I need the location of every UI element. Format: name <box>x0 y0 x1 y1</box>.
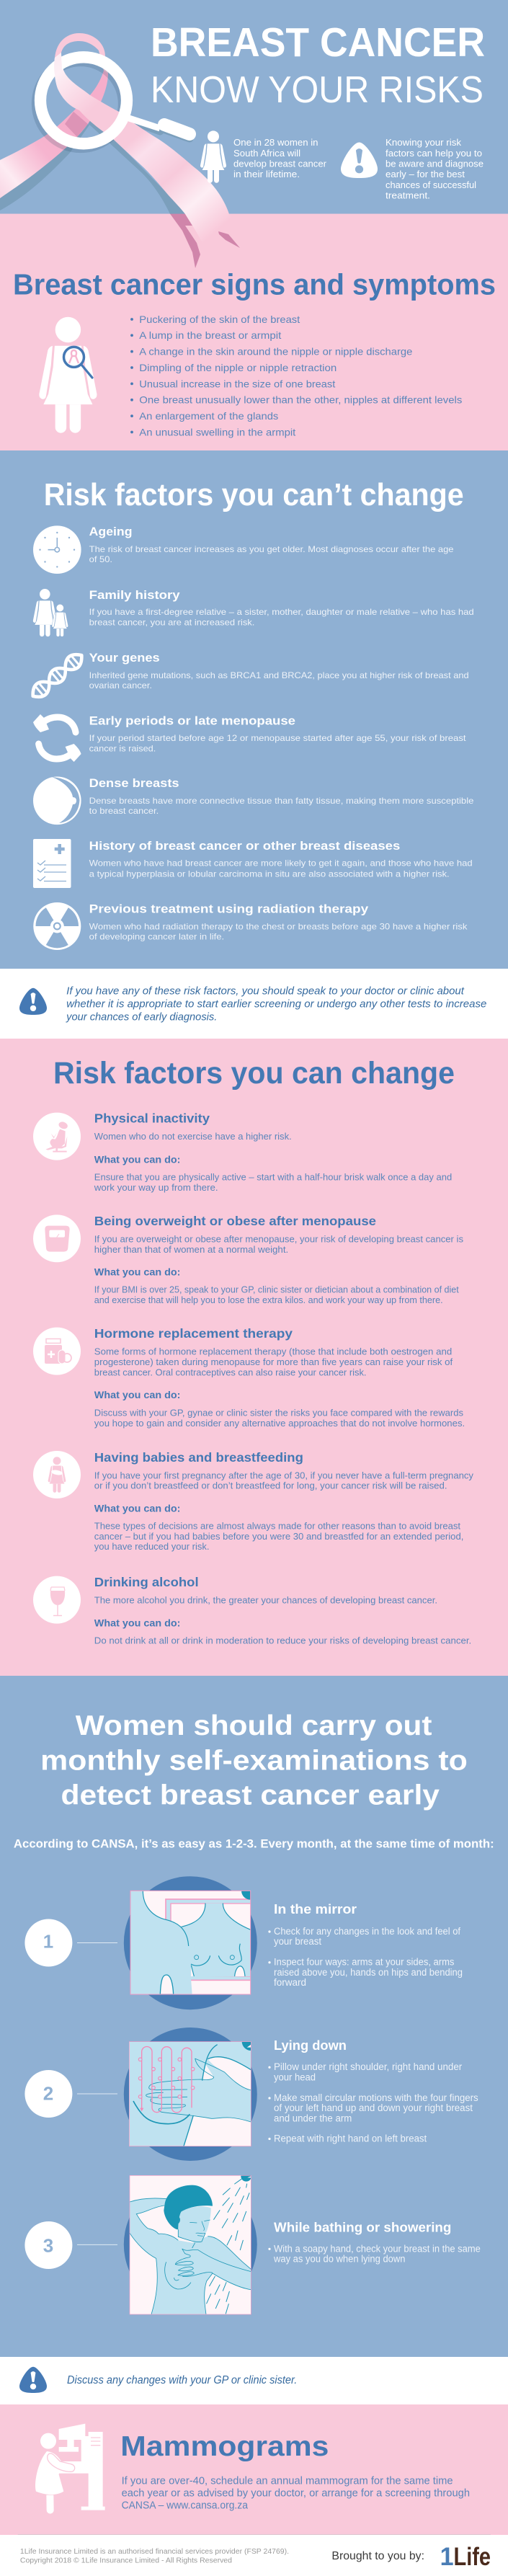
text: in the mirror: Check for any changes in the look and feel of <box>274 1926 460 1937</box>
heading: signs and symptoms: Breast cancer signs and symptoms <box>13 267 496 301</box>
step 1: in the mirror <box>24 1876 463 2009</box>
text: lying down: and under the arm <box>274 2113 352 2123</box>
title: babies and breastfeeding: Having babies and breastfeeding <box>94 1450 303 1465</box>
number badge 2: 2 <box>43 2082 53 2104</box>
text: overweight: If you are overweight or obese after menopause, your risk of developing breast cancer is <box>94 1235 463 1245</box>
title: lying down: Lying down <box>274 2038 347 2053</box>
list: symptoms: A change in the skin around the nipple or nipple discharge <box>139 346 413 357</box>
item: family history <box>33 588 474 636</box>
number badge 1: 1 <box>43 1931 53 1953</box>
title: previous treatment: Previous treatment using radiation therapy <box>89 902 369 915</box>
text: lying down: of your left hand up and down your right breast <box>274 2102 473 2113</box>
subheading: what you can do: What you can do: <box>94 1390 180 1400</box>
title: ageing: Ageing <box>89 525 133 538</box>
text: advice: you hope to gain and consider any alternative approaches that do not involve hormones. <box>94 1418 465 1429</box>
text: history of breast cancer: a typical hyperplasia or lobular carcinoma in situ are also associated with a higher risk. <box>89 869 450 879</box>
text: advice: work your way up from there. <box>94 1183 218 1193</box>
heading: self-examinations: monthly self-examinations to <box>40 1746 468 1776</box>
illustration: ribbon and magnifying glass <box>0 33 240 268</box>
text: knowing your risk factors: factors can help you to <box>386 148 482 159</box>
text: knowing your risk factors: be aware and diagnose <box>386 159 484 169</box>
text: ageing: of 50. <box>89 554 112 564</box>
text: lying down: Repeat with right hand on left breast <box>274 2133 427 2144</box>
text: knowing your risk factors <box>386 138 484 200</box>
heading: self-examinations: detect breast cancer early <box>61 1780 440 1811</box>
logo: 1Life: 1 <box>440 2543 454 2571</box>
illustration: woman in shower <box>124 2171 257 2314</box>
text: one in 28 women: One in 28 women in <box>233 138 318 148</box>
icon: radiation <box>33 902 81 950</box>
icon: warning <box>19 2367 47 2393</box>
text: advice: you have reduced your risk. <box>94 1542 209 1552</box>
text: your genes: Inherited gene mutations, such as BRCA1 and BRCA2, place you at higher risk of breast and <box>89 670 469 680</box>
text: babies and breastfeeding: or if you don’t breastfeed or don’t breastfeed for long, your cancer risk will be raised. <box>94 1481 447 1491</box>
panel: signs and symptoms <box>0 213 508 450</box>
subheading: according to CANSA: According to CANSA, it’s as easy as 1-2-3. Every month, at the same time of month: <box>14 1836 494 1850</box>
text: while bathing or showering: With a soapy hand, check your breast in the same <box>274 2243 481 2254</box>
icon: woman with magnifier <box>39 317 97 433</box>
list: symptoms: Unusual increase in the size of one breast <box>139 378 335 389</box>
text: mammogram advice: each year or as advised by your doctor, or arrange for a screening through <box>122 2487 470 2500</box>
text: legal notice <box>20 2547 289 2565</box>
logo: 1Life: Life <box>454 2543 491 2571</box>
text: mammogram advice: CANSA – www.cansa.org.za <box>122 2499 249 2511</box>
text: while bathing or showering <box>268 2243 481 2265</box>
text: history of breast cancer <box>89 858 473 879</box>
heading: self-examinations: Women should carry out <box>76 1710 432 1741</box>
item: ageing <box>33 525 454 574</box>
illustration: woman at mirror <box>124 1876 257 2009</box>
text: advice: If your BMI is over 25, speak to your GP, clinic sister or dietician about a combination of diet <box>94 1285 459 1295</box>
heading: risk factors you can change: Risk factors you can change <box>53 1057 455 1091</box>
text: speak to your doctor: your chances of early diagnosis. <box>66 1011 217 1023</box>
text: hormone replacement therapy: progesterone) taken during menopause for more than five years can raise your risk of <box>94 1357 453 1367</box>
icon: woman <box>200 130 226 183</box>
text: lying down: Make small circular motions with the four fingers <box>274 2092 478 2103</box>
title: know your risks: KNOW YOUR RISKS <box>151 69 484 111</box>
text: your genes: ovarian cancer. <box>89 680 152 690</box>
item: overweight <box>33 1214 463 1305</box>
number badge 3: 3 <box>43 2234 53 2256</box>
item: previous treatment <box>33 902 468 950</box>
text: overweight <box>94 1235 463 1255</box>
title: in the mirror: In the mirror <box>274 1902 357 1917</box>
text: previous treatment: Women who had radiation therapy to the chest or breasts before age 30 have a higher risk <box>89 921 468 931</box>
illustration: hand on breast with pattern <box>124 2028 257 2161</box>
text: advice: Discuss with your GP, gynae or clinic sister the risks you face compared with the rewards <box>94 1408 463 1418</box>
text: drinking alcohol: The more alcohol you drink, the greater your chances of developing breast cancer. <box>94 1596 437 1606</box>
panel: risk factors you can't change <box>0 450 508 969</box>
text: one in 28 women: in their lifetime. <box>233 169 300 179</box>
list: symptoms: A lump in the breast or armpit <box>139 329 281 341</box>
text: speak to your doctor <box>66 986 486 1023</box>
text: mammogram advice: If you are over-40, schedule an annual mammogram for the same time <box>122 2475 453 2487</box>
icon: warning <box>19 988 47 1015</box>
text: brought to you by: Brought to you by: <box>331 2550 424 2562</box>
icon: woman at mammogram machine <box>35 2424 105 2514</box>
panel: risk factors you can change <box>0 1039 508 1676</box>
panel: footer <box>0 2534 508 2576</box>
text: speak to your doctor: If you have any of these risk factors, you should speak to your doctor or clinic about <box>66 986 465 998</box>
title: early periods: Early periods or late menopause <box>89 714 295 728</box>
text: in the mirror: forward <box>274 1977 306 1988</box>
title: your genes: Your genes <box>89 651 160 665</box>
text: advice <box>94 1172 452 1193</box>
icon: medical checklist <box>33 839 71 888</box>
title: family history: Family history <box>89 588 180 602</box>
list: symptoms: Dimpling of the nipple or nipple retraction <box>139 362 337 373</box>
text: mammogram advice <box>122 2475 470 2511</box>
item: history of breast cancer <box>33 839 473 888</box>
text: hormone replacement therapy: breast cancer. Oral contraceptives can also raise your cancer risk. <box>94 1367 367 1377</box>
text: early periods: If your period started before age 12 or menopause started after age 55, your risk of breast <box>89 733 466 743</box>
subheading: what you can do: What you can do: <box>94 1154 180 1165</box>
text: advice: These types of decisions are almost always made for other reasons than to avoid breast <box>94 1521 461 1531</box>
title: dense breasts: Dense breasts <box>89 776 179 790</box>
text: hormone replacement therapy: Some forms of hormone replacement therapy (those that include both oestrogen and <box>94 1347 452 1357</box>
icon: cycle arrows <box>33 714 81 762</box>
icon: mother feeding baby <box>33 1451 81 1498</box>
text: ageing: The risk of breast cancer increases as you get older. Most diagnoses occur after the age <box>89 544 454 554</box>
step 3: while bathing or showering <box>24 2171 481 2314</box>
panel: hero <box>0 0 508 268</box>
icon: pills <box>33 1328 81 1375</box>
text: babies and breastfeeding <box>94 1470 474 1491</box>
subheading: what you can do: What you can do: <box>94 1267 180 1277</box>
text: legal notice: Copyright 2018 © 1Life Insurance Limited - All Rights Reserved <box>20 2557 232 2565</box>
text: ageing <box>89 544 454 564</box>
text: knowing your risk factors: treatment. <box>386 190 430 200</box>
text: in the mirror: Inspect four ways: arms at your sides, arms <box>274 1957 455 1968</box>
text: dense breasts <box>89 796 474 816</box>
list: symptoms <box>130 314 462 438</box>
text: hormone replacement therapy <box>94 1347 453 1377</box>
panel: mammograms <box>0 2404 508 2535</box>
text: physical inactivity: Women who do not exercise have a higher risk. <box>94 1132 292 1142</box>
text: speak to your doctor: whether it is appropriate to start earlier screening or undergo any other tests to increase <box>66 998 486 1010</box>
list: symptoms: An unusual swelling in the armpit <box>139 427 295 438</box>
text: advice: Do not drink at all or drink in moderation to reduce your risks of developing breast cancer. <box>94 1635 471 1645</box>
text: advice: Ensure that you are physically active – start with a half-hour brisk walk once a day and <box>94 1172 452 1182</box>
item: early periods <box>33 714 466 762</box>
text: dense breasts: Dense breasts have more connective tissue than fatty tissue, making them more susceptible <box>89 796 474 806</box>
panel: discuss with GP callout <box>0 2357 508 2404</box>
number badge 2 <box>24 2070 72 2118</box>
heading: risk factors you can't change: Risk factors you can’t change <box>44 477 464 512</box>
text: babies and breastfeeding: If you have your first pregnancy after the age of 30, if you never have a full-term pregnancy <box>94 1470 474 1480</box>
number badge 3 <box>24 2221 72 2269</box>
text: history of breast cancer: Women who have had breast cancer are more likely to get it again, and those who have had <box>89 858 473 868</box>
text: family history <box>89 607 474 627</box>
icon: mother and child <box>33 589 68 636</box>
item: your genes <box>29 650 469 701</box>
item: babies and breastfeeding <box>33 1450 474 1552</box>
text: advice <box>94 1285 459 1305</box>
list: symptoms: One breast unusually lower than the other, nipples at different levels <box>139 394 462 406</box>
text: family history: If you have a first-degree relative – a sister, mother, daughter or male relative – who has had <box>89 607 474 617</box>
icon: dna <box>29 650 86 701</box>
icon: scale <box>33 1214 81 1262</box>
title: hormone replacement therapy: Hormone replacement therapy <box>94 1326 293 1341</box>
heading: mammograms: Mammograms <box>120 2431 329 2462</box>
text: previous treatment: of developing cancer later in life. <box>89 932 224 942</box>
icon: warning <box>341 143 378 178</box>
number badge 1 <box>24 1919 72 1966</box>
text: family history: breast cancer, you are at increased risk. <box>89 617 254 627</box>
item: drinking alcohol <box>33 1575 471 1645</box>
text: previous treatment <box>89 921 468 942</box>
text: lying down: your head <box>274 2071 316 2083</box>
item: hormone replacement therapy <box>33 1326 465 1429</box>
text: your genes <box>89 670 469 690</box>
text: early periods: cancer is raised. <box>89 743 156 753</box>
text: lying down: Pillow under right shoulder, right hand under <box>274 2061 463 2072</box>
text: one in 28 women <box>233 138 326 179</box>
text: in the mirror: your breast <box>274 1936 321 1947</box>
text: legal notice: 1Life Insurance Limited is an authorised financial services provider (FSP 24769). <box>20 2547 289 2556</box>
text: one in 28 women: develop breast cancer <box>233 159 326 169</box>
text: knowing your risk factors: early – for the best <box>386 169 465 179</box>
step 2: lying down <box>24 2028 478 2161</box>
text: advice <box>94 1408 465 1429</box>
title: overweight: Being overweight or obese after menopause <box>94 1214 376 1228</box>
title: history of breast cancer: History of breast cancer or other breast diseases <box>89 839 400 853</box>
item: physical inactivity <box>33 1111 452 1193</box>
text: knowing your risk factors: chances of successful <box>386 180 476 190</box>
title: physical inactivity: Physical inactivity <box>94 1111 210 1126</box>
subheading: what you can do: What you can do: <box>94 1503 180 1514</box>
text: dense breasts: to breast cancer. <box>89 806 159 816</box>
title: while bathing or showering: While bathing or showering <box>274 2220 451 2234</box>
text: in the mirror: raised above you, hands on hips and bending <box>274 1967 463 1978</box>
list: symptoms: An enlargement of the glands <box>139 410 278 422</box>
panel: self-examination <box>0 1676 508 2357</box>
text: overweight: higher than that of women at a normal weight. <box>94 1245 288 1255</box>
text: early periods <box>89 733 466 753</box>
text: advice: and exercise that will help you to lose the extra kilos. and work your way up from there. <box>94 1295 443 1305</box>
text: knowing your risk factors: Knowing your risk <box>386 138 462 148</box>
subheading: what you can do: What you can do: <box>94 1617 180 1628</box>
text: one in 28 women: South Africa will <box>233 148 300 159</box>
title: breast cancer: BREAST CANCER <box>151 19 485 66</box>
heading: self-examinations <box>40 1710 468 1811</box>
text: lying down <box>268 2061 478 2144</box>
list: symptoms: Puckering of the skin of the breast <box>139 314 300 325</box>
icon: wine glass <box>33 1576 81 1624</box>
icon: breast <box>33 777 81 825</box>
item: dense breasts <box>33 776 474 825</box>
title: drinking alcohol: Drinking alcohol <box>94 1575 199 1589</box>
text: discuss changes: Discuss any changes with your GP or clinic sister. <box>67 2374 297 2386</box>
text: while bathing or showering: way as you do when lying down <box>273 2254 405 2265</box>
text: in the mirror <box>268 1926 463 1988</box>
text: advice <box>94 1521 463 1552</box>
icon: seated woman <box>33 1113 81 1160</box>
panel: speak to your doctor callout <box>0 969 508 1039</box>
text: advice: cancer – but if you had babies before you were 30 and breastfed for an extended period, <box>94 1532 463 1542</box>
icon: clock <box>33 525 81 574</box>
logo: 1Life <box>440 2543 491 2571</box>
